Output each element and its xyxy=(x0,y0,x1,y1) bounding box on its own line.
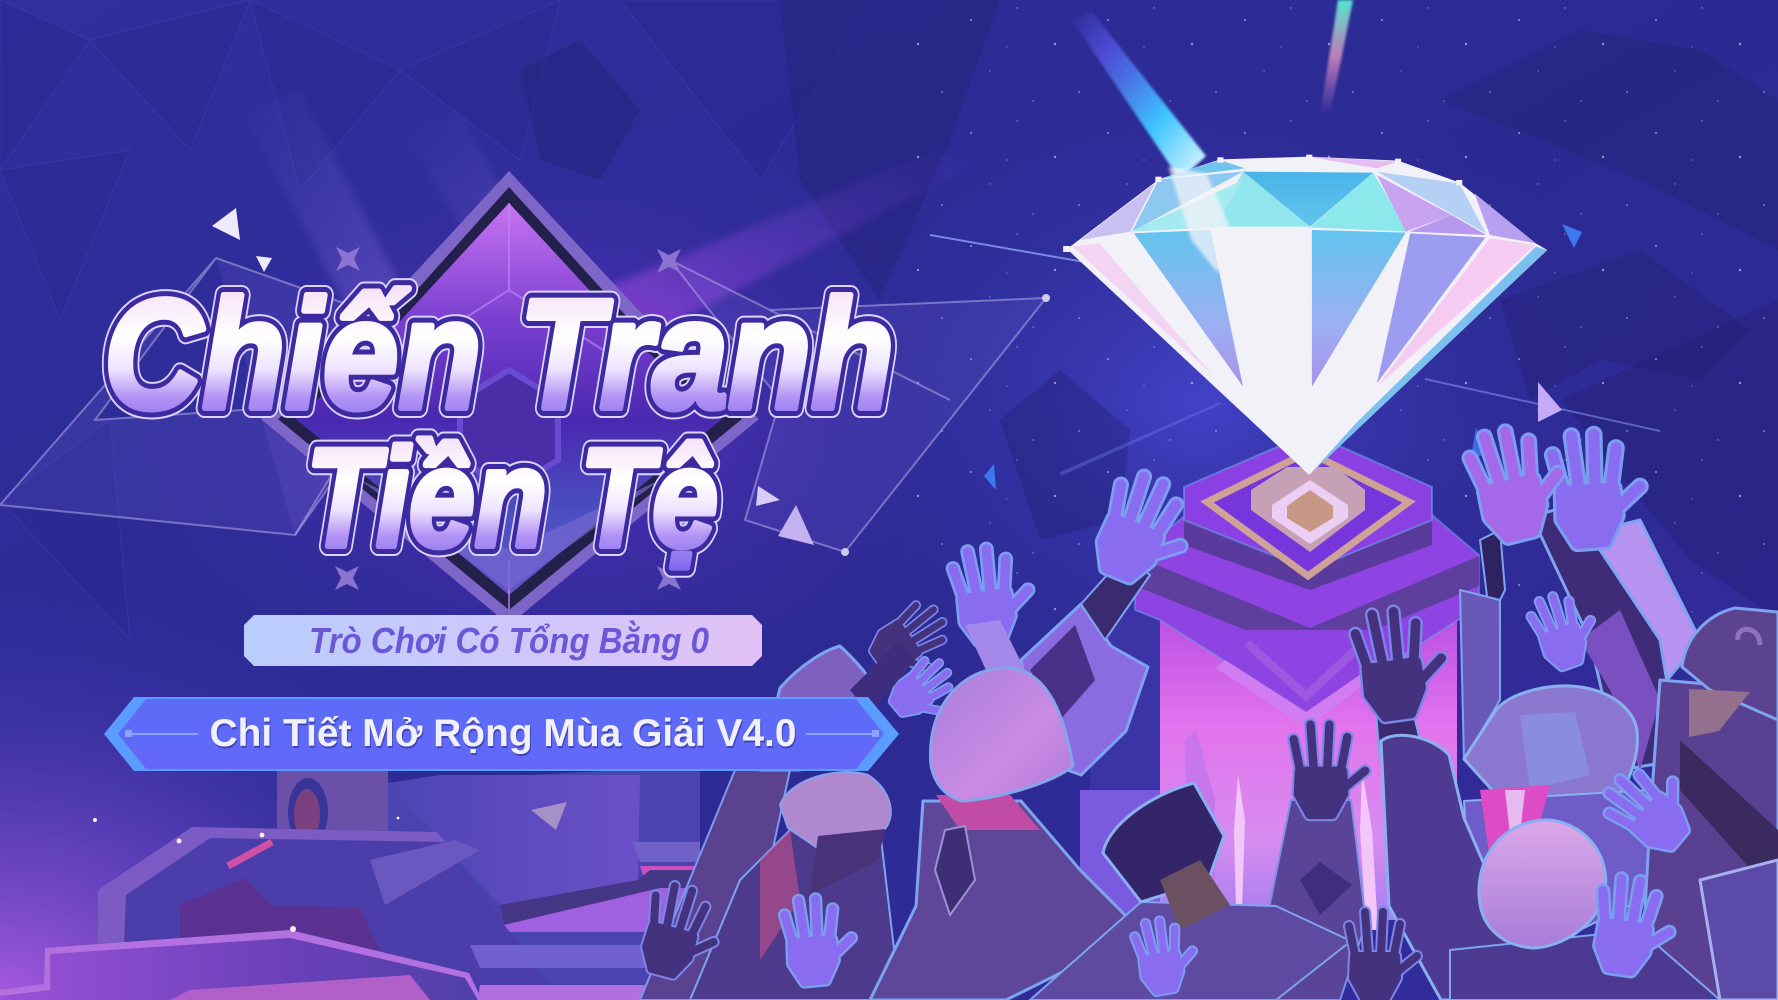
pillar light strips xyxy=(1234,770,1378,930)
pink-haired front figure body xyxy=(1450,930,1720,1000)
title line 1: Chiến Tranh xyxy=(104,268,894,442)
second tier xyxy=(1135,515,1479,715)
version banner xyxy=(104,697,899,771)
crown facets xyxy=(1243,172,1373,227)
small left head xyxy=(690,830,900,1000)
pink-haired girl hair xyxy=(930,668,1073,801)
floating triangles xyxy=(212,208,1582,545)
rainbow beams above diamond xyxy=(1072,0,1353,180)
background silhouettes xyxy=(520,0,1778,620)
version banner: Chi Tiết Mở Rộng Mùa Giải V4.0 xyxy=(210,712,796,755)
centre forearm xyxy=(1261,800,1366,1000)
pink-haired front figure hair xyxy=(1479,820,1606,948)
core gem xyxy=(1251,467,1365,552)
crowd: middle row xyxy=(637,606,1778,1000)
title emblem xyxy=(261,171,759,625)
long arm xyxy=(1381,735,1577,1000)
title line 1: Chiến Tranh xyxy=(104,268,894,442)
bottom hands xyxy=(637,882,725,983)
chevron xyxy=(1216,660,1384,728)
triangle mosaic xyxy=(0,0,870,640)
lower pillar xyxy=(1160,600,1457,920)
title line 2: Tiền Tệ xyxy=(306,419,718,576)
beam glare xyxy=(1168,167,1230,273)
light beams xyxy=(240,90,1660,476)
title text xyxy=(104,268,894,576)
right sided sleeve near pillar xyxy=(1460,590,1500,760)
starfield xyxy=(900,0,1778,640)
pedestal xyxy=(1080,433,1479,930)
sleeve behind pink girl xyxy=(1021,604,1148,775)
subtitle pill: Trò Chơi Có Tổng Bằng 0 xyxy=(309,619,709,661)
top tier xyxy=(1184,433,1432,590)
sparkle marks xyxy=(335,247,681,590)
title line 2: Tiền Tệ xyxy=(306,419,718,576)
right middle figure xyxy=(1464,686,1637,801)
crowd: back row xyxy=(640,422,1778,1000)
back wall panels xyxy=(1090,600,1160,790)
pavilion facets xyxy=(1134,230,1243,387)
subtitle pill xyxy=(244,615,762,666)
diamond xyxy=(1063,155,1547,475)
far-left raised arm xyxy=(640,770,790,1000)
dark hand behind centre xyxy=(1375,700,1425,760)
constellation polygons xyxy=(0,258,1050,556)
title line 2: Tiền Tệ xyxy=(306,419,718,576)
dark capped figure xyxy=(1030,902,1351,1000)
inlay xyxy=(1207,452,1409,576)
version banner: Chi Tiết Mở Rộng Mùa Giải V4.0 xyxy=(210,714,798,757)
right arm with dark glove xyxy=(1584,520,1700,680)
bottom-left machinery xyxy=(0,770,740,1000)
right capped figure xyxy=(1640,680,1778,1000)
pink-haired girl body xyxy=(870,801,1126,1000)
title line 1: Chiến Tranh xyxy=(104,268,894,442)
vertices xyxy=(1063,155,1462,252)
